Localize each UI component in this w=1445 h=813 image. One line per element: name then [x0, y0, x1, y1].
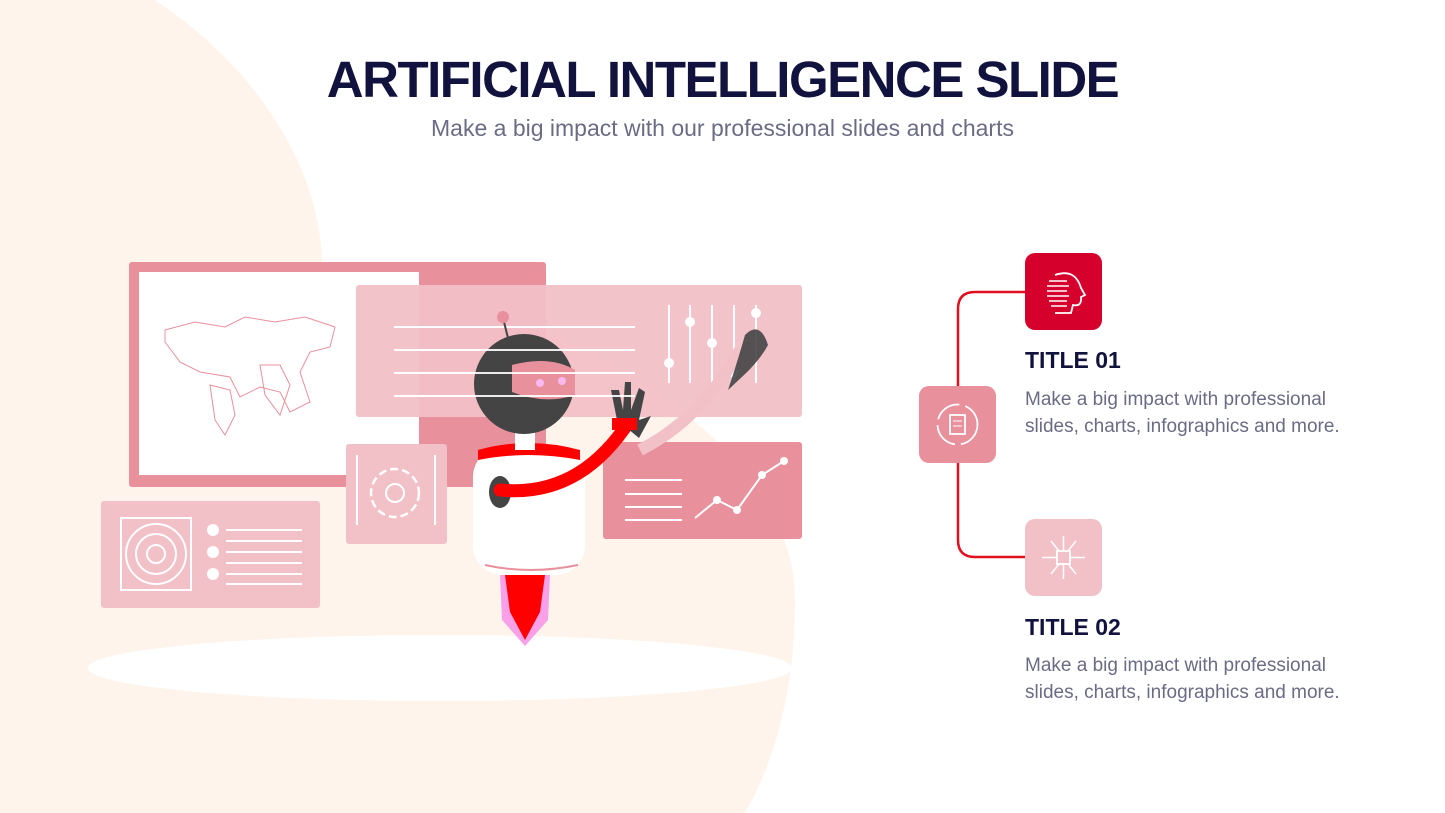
text 01	[1025, 389, 1340, 437]
title: ARTIFICIAL INTELLIGENCE SLIDE	[327, 51, 1118, 108]
icon: chip (title 02)	[1025, 519, 1102, 596]
text 01: Make a big impact with professional	[1025, 389, 1326, 410]
map panel	[129, 262, 546, 487]
robot	[473, 311, 768, 646]
text 02: Make a big impact with professional	[1025, 655, 1326, 676]
subtitle: Make a big impact with our professional slides and charts	[431, 115, 1014, 141]
chart panel	[603, 442, 802, 539]
icon: center cycle	[919, 386, 996, 463]
text 01: slides, charts, infographics and more.	[1025, 416, 1340, 437]
top panel with lines and sliders	[356, 285, 802, 417]
text 02	[1025, 655, 1340, 703]
illustration: AI robot with screens	[101, 262, 802, 646]
gear panel	[346, 444, 447, 544]
text 02: slides, charts, infographics and more.	[1025, 682, 1340, 703]
title 01: TITLE 01	[1025, 347, 1121, 373]
target panel	[101, 501, 320, 608]
title 02: TITLE 02	[1025, 614, 1121, 640]
icon: head (title 01)	[1025, 253, 1102, 330]
